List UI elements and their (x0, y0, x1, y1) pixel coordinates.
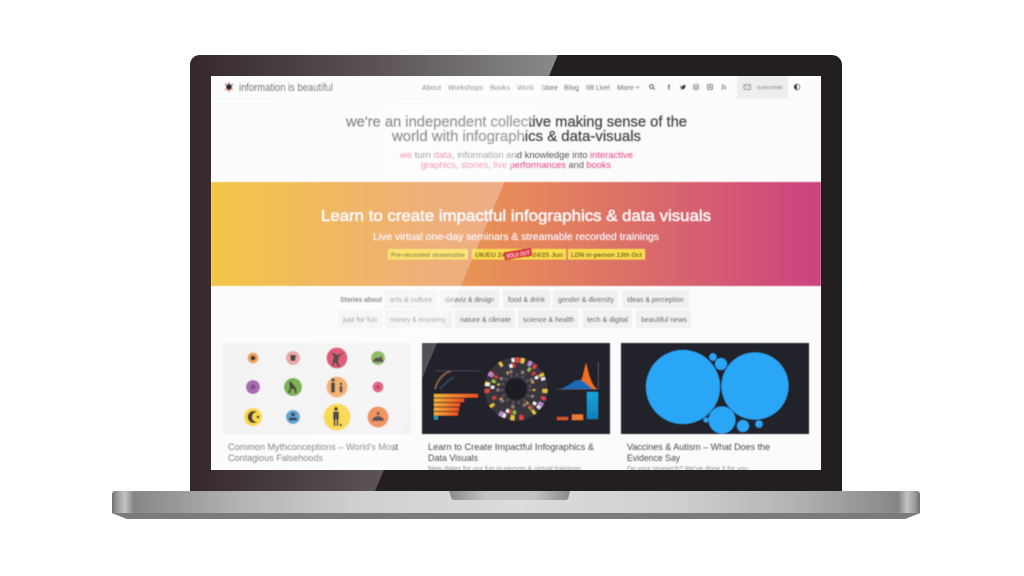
category tags (338, 290, 691, 328)
nav links: More (617, 83, 634, 92)
badge: UK/EU: UK/EU 2x 17/18 & 24/25 Jun (475, 252, 563, 259)
screen glare (211, 76, 549, 491)
card title: Vaccines & Autism – What Does the (627, 442, 770, 452)
card: workshops (422, 343, 610, 473)
nav links: Books (490, 83, 510, 92)
icon: search (650, 85, 655, 90)
headline: we're an independent collective making sense of the (345, 114, 687, 130)
category tags: beautiful news (641, 317, 687, 324)
category tags: dataviz & design (445, 297, 494, 304)
category tags: science & health (523, 317, 574, 324)
card title: Common Mythconceptions – World's Most (228, 442, 398, 452)
nav links (422, 84, 634, 92)
category tags: gender & diversity (558, 297, 614, 304)
nav links: IIB Live! (586, 83, 610, 92)
nav links: Blog (564, 83, 579, 92)
card title: Data Visuals (428, 453, 478, 463)
card: mythconceptions (223, 343, 411, 463)
badge: pre-recorded: Pre-recorded streamable (391, 252, 465, 259)
subheading: graphics, stories, live performances and books (421, 160, 611, 170)
card excerpt: Do your research? We've done it for you (627, 464, 748, 473)
subheading: we turn data, information and knowledge into interactive (399, 150, 633, 160)
icon: dark mode toggle (794, 84, 800, 90)
category tags: ideas & perception (627, 297, 684, 304)
category tags: just for fun (342, 317, 377, 324)
bar chart left (434, 370, 479, 420)
sold out stamp: SOLD OUT (506, 250, 531, 260)
laptop bezel (180, 45, 842, 491)
laptop base (112, 491, 920, 519)
subscribe button (737, 76, 788, 98)
badge: LDN: LDN in-person 13th Oct (571, 252, 643, 259)
card title: Contagious Falsehoods (228, 453, 323, 463)
subscribe button: SUBSCRIBE (757, 85, 783, 90)
area chart right (556, 362, 599, 390)
card title (428, 442, 595, 463)
bubble chart (646, 350, 788, 434)
icon: logo (224, 82, 234, 92)
banner subtitle: Live virtual one-day seminars & streamable recorded trainings (373, 231, 659, 243)
donut chart (487, 360, 545, 418)
banner title: Learn to create impactful infographics & data visuals (321, 208, 711, 225)
headline: world with infographics & data-visuals (391, 128, 641, 145)
laptop mockup infographic (112, 55, 920, 519)
card title: Learn to Create Impactful Infographics & (428, 442, 595, 452)
logo wordmark: information is beautiful (239, 82, 333, 94)
bar chart bottom right (557, 392, 598, 420)
badge: UK/EU (472, 249, 566, 260)
badge: LDN (568, 249, 645, 260)
navigation bar (224, 76, 801, 98)
icon grid of coloured circles (244, 348, 388, 430)
nav links: Store (541, 83, 558, 92)
category tags: tech & digital (587, 317, 628, 324)
card title (627, 442, 770, 463)
card title: Evidence Say (627, 453, 680, 463)
card: vaccines and autism (621, 343, 809, 473)
badge: pre-recorded (388, 249, 468, 260)
category tags: money & economy (390, 317, 446, 324)
screen content (211, 76, 821, 491)
social icons (668, 83, 726, 92)
category tags: arts & culture (390, 297, 432, 304)
nav links: About (422, 83, 441, 92)
promo banner (211, 182, 821, 286)
card title (228, 442, 398, 463)
subheading (399, 150, 633, 170)
nav links: Work (517, 83, 534, 92)
headline (345, 114, 687, 145)
category tags: food & drink (508, 297, 545, 304)
card excerpt: New dates for our fun in-person & virtual trainings (428, 464, 581, 473)
nav links: Workshops (448, 83, 483, 92)
social icons: f (668, 83, 671, 92)
label: stories about: Stories about (340, 297, 383, 304)
trackpad notch (449, 491, 570, 500)
category tags: nature & climate (460, 317, 511, 324)
